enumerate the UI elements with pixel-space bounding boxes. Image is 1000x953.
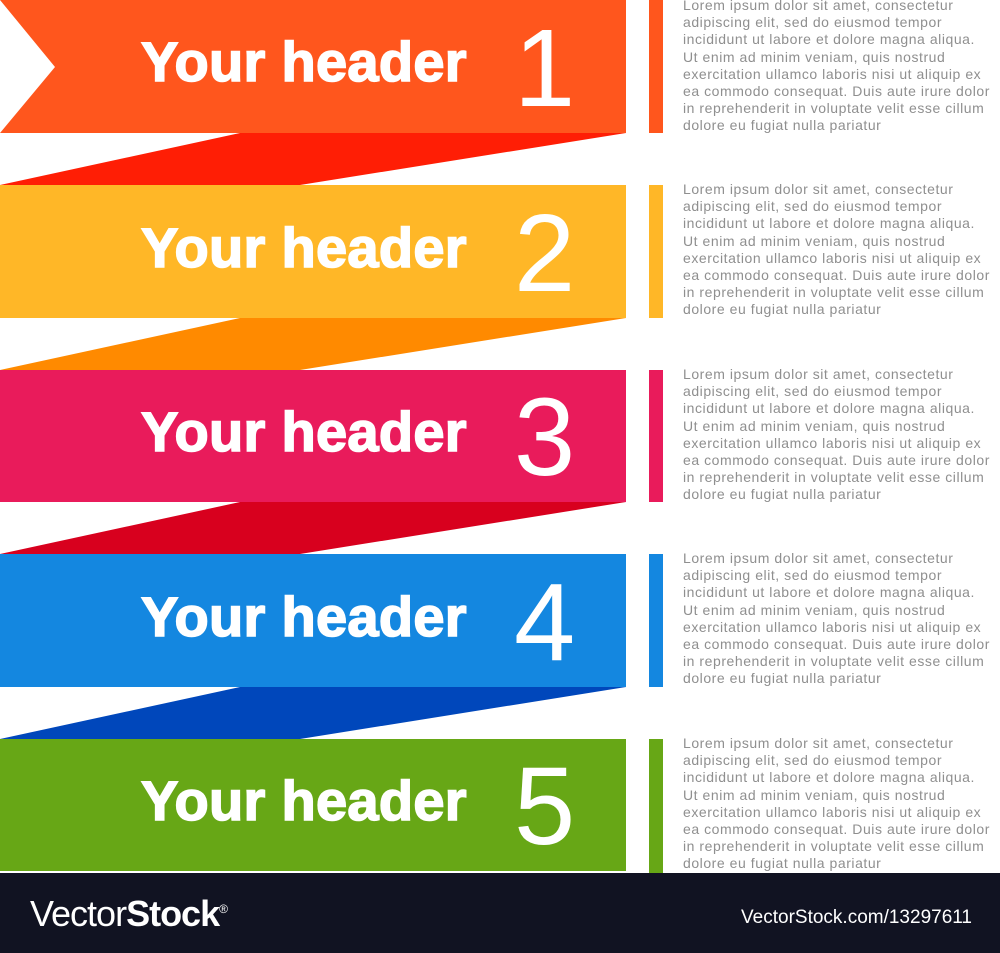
text block 2: dolore eu fugiat nulla pariatur — [683, 301, 881, 317]
text block 4: exercitation ullamco laboris nisi ut aliquip ex — [683, 619, 981, 635]
band 2: 2 — [514, 192, 575, 315]
text block 2: exercitation ullamco laboris nisi ut aliquip ex — [683, 250, 981, 266]
text block 2: ea commodo consequat. Duis aute irure dolor — [683, 267, 990, 283]
band 1 — [0, 0, 626, 133]
fold 3-4 — [0, 502, 626, 554]
text block 4: incididunt ut labore et dolore magna aliqua. — [683, 584, 975, 600]
text block 5: exercitation ullamco laboris nisi ut aliquip ex — [683, 804, 981, 820]
fold 2-3 — [0, 318, 626, 370]
band 2 — [0, 185, 626, 318]
text block 1 — [683, 0, 990, 133]
text block 3: in reprehenderit in voluptate velit esse cillum — [683, 469, 984, 485]
text block 5: incididunt ut labore et dolore magna aliqua. — [683, 769, 975, 785]
text block 2 — [683, 181, 990, 317]
text block 1: ea commodo consequat. Duis aute irure dolor — [683, 83, 990, 99]
text block 1: in reprehenderit in voluptate velit esse cillum — [683, 100, 984, 116]
text block 4: dolore eu fugiat nulla pariatur — [683, 670, 881, 686]
band 1: 1 — [514, 7, 575, 130]
band 5: 5 — [514, 745, 575, 868]
text block 4: adipiscing elit, sed do eiusmod tempor — [683, 567, 942, 583]
text block 1: adipiscing elit, sed do eiusmod tempor — [683, 14, 942, 30]
text block 5: Ut enim ad minim veniam, quis nostrud — [683, 787, 945, 803]
text block 3: incididunt ut labore et dolore magna aliqua. — [683, 400, 975, 416]
text block 1: dolore eu fugiat nulla pariatur — [683, 117, 881, 133]
text block 4: in reprehenderit in voluptate velit esse cillum — [683, 653, 984, 669]
fold 4-5 — [0, 687, 626, 739]
text block 4: Lorem ipsum dolor sit amet, consectetur — [683, 550, 953, 566]
text block 5: adipiscing elit, sed do eiusmod tempor — [683, 752, 942, 768]
text block 3: Ut enim ad minim veniam, quis nostrud — [683, 418, 945, 434]
band 3: 3 — [514, 376, 575, 499]
text block 5: in reprehenderit in voluptate velit esse cillum — [683, 838, 984, 854]
text block 3: ea commodo consequat. Duis aute irure dolor — [683, 452, 990, 468]
text block 2: Ut enim ad minim veniam, quis nostrud — [683, 233, 945, 249]
band 4 — [0, 554, 626, 687]
band 4: Your header — [141, 585, 467, 648]
text block 3: Lorem ipsum dolor sit amet, consectetur — [683, 366, 953, 382]
band 3 — [0, 370, 626, 502]
text block 2: incididunt ut labore et dolore magna aliqua. — [683, 215, 975, 231]
text block 1: exercitation ullamco laboris nisi ut aliquip ex — [683, 66, 981, 82]
text block 2: in reprehenderit in voluptate velit esse cillum — [683, 284, 984, 300]
text block 3: exercitation ullamco laboris nisi ut aliquip ex — [683, 435, 981, 451]
text block 1: Ut enim ad minim veniam, quis nostrud — [683, 49, 945, 65]
text block 5: Lorem ipsum dolor sit amet, consectetur — [683, 735, 953, 751]
text block 4: ea commodo consequat. Duis aute irure dolor — [683, 636, 990, 652]
text block 3: adipiscing elit, sed do eiusmod tempor — [683, 383, 942, 399]
fold 1-2 — [0, 133, 626, 185]
text block 2: adipiscing elit, sed do eiusmod tempor — [683, 198, 942, 214]
footer url: VectorStock.com/13297611 — [741, 907, 972, 928]
band 5: Your header — [141, 769, 467, 832]
footer logo: VectorStock® — [30, 893, 227, 934]
text block 4 — [683, 550, 990, 686]
band 3: Your header — [141, 400, 467, 463]
band 1: Your header — [141, 30, 467, 93]
text block 1: incididunt ut labore et dolore magna aliqua. — [683, 31, 975, 47]
band 4: 4 — [514, 561, 575, 684]
band 2: Your header — [141, 216, 467, 279]
text block 5: ea commodo consequat. Duis aute irure dolor — [683, 821, 990, 837]
band 5 — [0, 739, 626, 871]
text block 3 — [683, 366, 990, 502]
footer — [0, 873, 1000, 953]
text block 2: Lorem ipsum dolor sit amet, consectetur — [683, 181, 953, 197]
text block 4: Ut enim ad minim veniam, quis nostrud — [683, 602, 945, 618]
text block 5: dolore eu fugiat nulla pariatur — [683, 855, 881, 871]
text block 3: dolore eu fugiat nulla pariatur — [683, 486, 881, 502]
accent bars — [649, 0, 663, 873]
text block 5 — [683, 735, 990, 871]
